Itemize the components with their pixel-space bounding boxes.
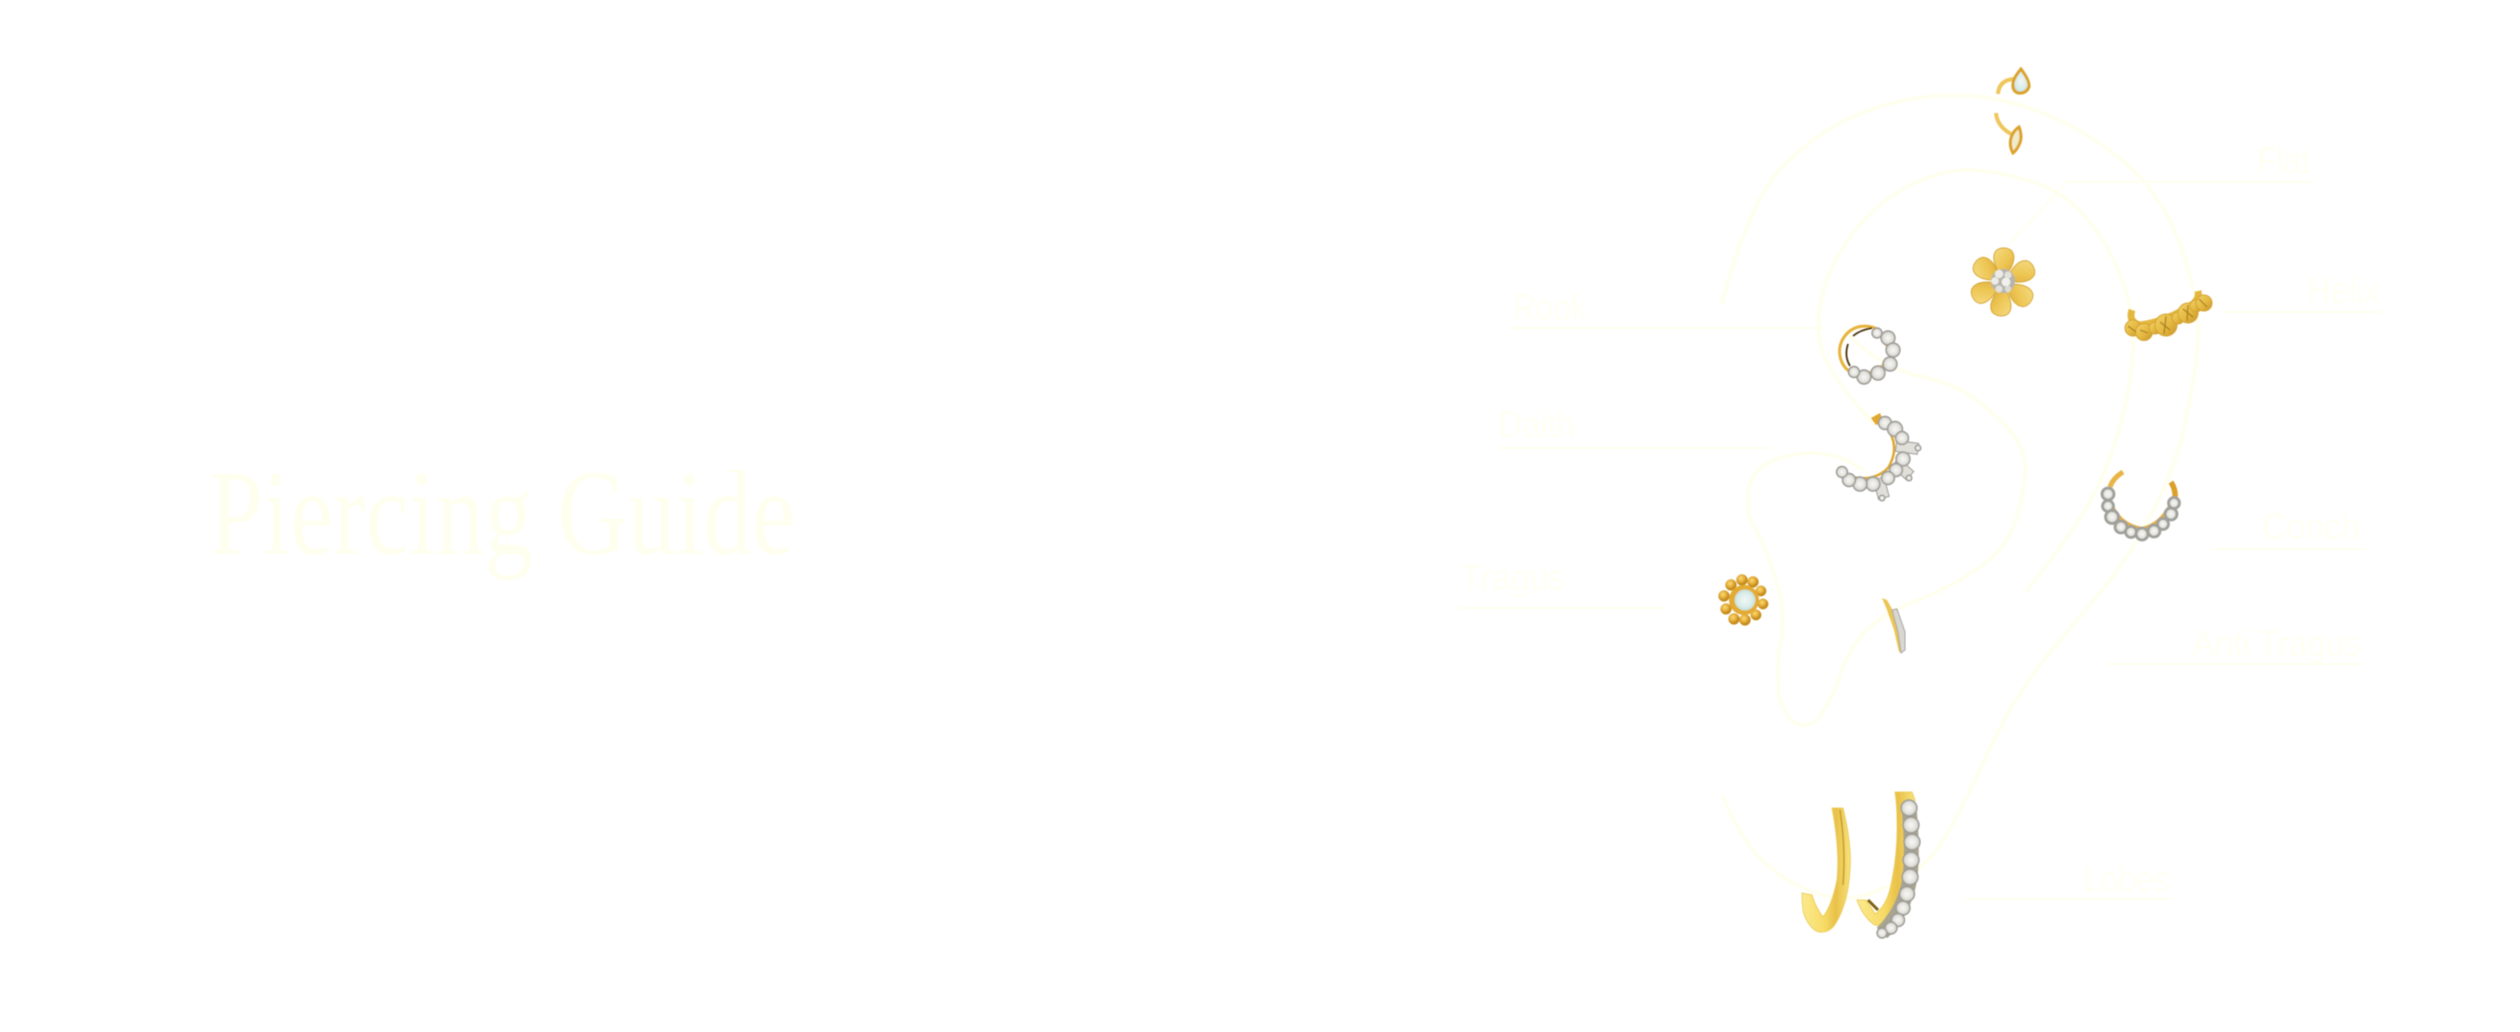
label: Flat bbox=[2010, 140, 2313, 243]
jewel: diamond lobe hoop bbox=[1857, 792, 1920, 938]
antihelix and tragus curve bbox=[1748, 330, 2025, 725]
jewel: helix gold ring bbox=[2125, 291, 2212, 340]
label: Helix: Helix bbox=[2307, 270, 2380, 311]
jewel: flat barbell with opal drops bbox=[1996, 69, 2029, 153]
outer ear curve bbox=[1722, 95, 2198, 898]
ear outline bbox=[1722, 95, 2198, 898]
jewel: conch ring bbox=[2102, 472, 2180, 540]
jewel: daith ring bbox=[1836, 413, 1921, 501]
jewel: anti-tragus hoop bbox=[1882, 598, 1905, 653]
jewel: plain gold lobe hoop bbox=[1802, 808, 1850, 932]
jewel: tragus stud with pearl bbox=[1718, 574, 1768, 626]
inner helix curve bbox=[1819, 170, 2133, 590]
label: Flat: Flat bbox=[2257, 140, 2311, 181]
jewel: rook ring bbox=[1840, 326, 1900, 384]
label: Daith: Daith bbox=[1498, 404, 1575, 445]
jewel: flower stud bbox=[1968, 248, 2038, 317]
label: Rook: Rook bbox=[1513, 287, 1587, 328]
label: Tragus: Tragus bbox=[1461, 557, 1565, 598]
title: Piercing Guide bbox=[209, 446, 795, 581]
label: Anti Tragus: Anti Tragus bbox=[2192, 623, 2361, 664]
label: Conch: Conch bbox=[2262, 506, 2360, 547]
label: Lobes: Lobes bbox=[2083, 859, 2170, 900]
